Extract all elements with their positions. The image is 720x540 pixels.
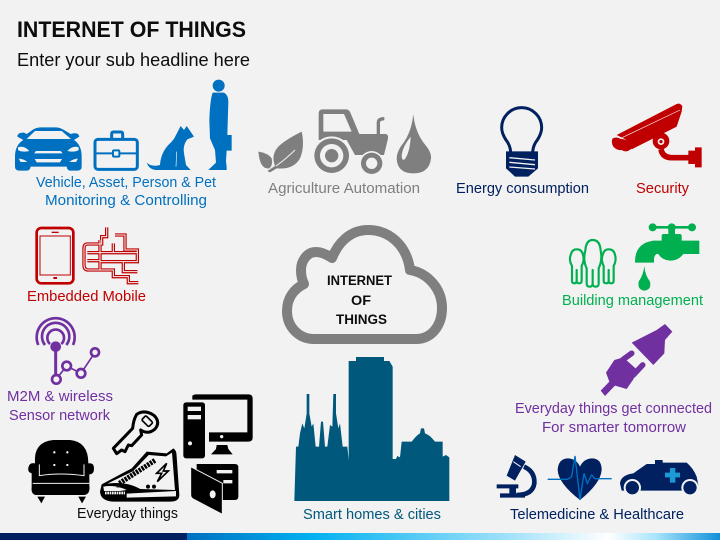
icon: leaves — [258, 132, 303, 172]
panel: telemedicine and healthcare — [497, 455, 699, 523]
label: connected — [515, 401, 712, 436]
label: telemedicine: Telemedicine & Healthcare — [510, 507, 684, 523]
cloud label: INTERNET — [327, 273, 393, 288]
icons: people and tap — [570, 223, 699, 291]
icon: city skyline — [294, 357, 449, 501]
label: building: Building management — [562, 293, 703, 309]
icon: microscope — [497, 455, 534, 498]
footer bar — [0, 533, 720, 540]
icon: car — [15, 127, 82, 171]
icon: key — [113, 412, 158, 454]
label: vehicle monitoring: Vehicle, Asset, Person & Pet — [36, 175, 216, 191]
label: M2M: M2M & wireless — [7, 389, 113, 405]
label: agriculture: Agriculture Automation — [268, 181, 420, 197]
icon: wallet — [191, 464, 238, 514]
icon: briefcase — [95, 132, 137, 169]
icons: chair, key, shoe, computer, wallet — [28, 394, 253, 514]
icon: water drop — [397, 114, 431, 173]
icon: people — [570, 240, 616, 287]
icon: ambulance — [620, 460, 699, 496]
panel: vehicle, asset, person and pet — [15, 80, 232, 209]
icon: dog — [147, 126, 194, 170]
label: embedded: Embedded Mobile — [27, 289, 146, 305]
icon: person with briefcase — [208, 80, 232, 170]
label: connected: For smarter tomorrow — [542, 420, 687, 436]
icons: car, briefcase, dog, person — [15, 80, 232, 171]
icon: light bulb — [502, 108, 542, 177]
label: smart homes: Smart homes & cities — [303, 507, 441, 523]
icons: microscope, heart, ambulance — [497, 455, 699, 500]
cloud label — [327, 273, 393, 327]
panel: building management — [562, 223, 703, 309]
label: connected: Everyday things get connected — [515, 401, 712, 417]
icon: water tap — [635, 223, 699, 291]
icons: leaf, tractor, drop — [258, 109, 431, 176]
panel: M2M and wireless — [7, 318, 113, 424]
label: everyday things: Everyday things — [77, 506, 178, 522]
icon: circuit — [84, 227, 138, 283]
central cloud — [287, 230, 442, 339]
icon: wireless sensor network — [37, 318, 99, 384]
panel: agriculture automation — [258, 109, 431, 197]
panel: everyday things — [28, 394, 253, 522]
icon: cloud — [287, 230, 442, 339]
icon: security camera — [612, 104, 702, 167]
label: vehicle monitoring — [36, 175, 216, 209]
label: energy: Energy consumption — [456, 181, 589, 197]
title: INTERNET OF THINGS — [17, 17, 246, 42]
panel: security — [612, 104, 702, 197]
label: M2M: Sensor network — [9, 408, 111, 424]
icon: armchair — [28, 440, 94, 503]
cloud label: OF — [351, 293, 371, 308]
panel: everyday things get connected — [515, 324, 712, 436]
icon: desktop computer — [183, 394, 253, 458]
panel: smart homes and cities — [294, 357, 449, 523]
icon: sneaker — [100, 448, 179, 502]
icons: phone and circuit — [37, 227, 138, 283]
label: security: Security — [636, 181, 690, 197]
icon: heart with pulse — [548, 456, 612, 500]
icon: phone — [37, 228, 73, 283]
cloud label: THINGS — [336, 312, 387, 327]
icon: tractor — [312, 109, 388, 176]
sub headline: Enter your sub headline here — [17, 49, 250, 70]
label: vehicle monitoring: Monitoring & Controlling — [45, 193, 207, 209]
label: M2M — [7, 389, 113, 424]
icon: plug and socket — [601, 324, 672, 396]
panel: energy consumption — [456, 108, 589, 197]
panel: embedded mobile — [27, 227, 146, 305]
